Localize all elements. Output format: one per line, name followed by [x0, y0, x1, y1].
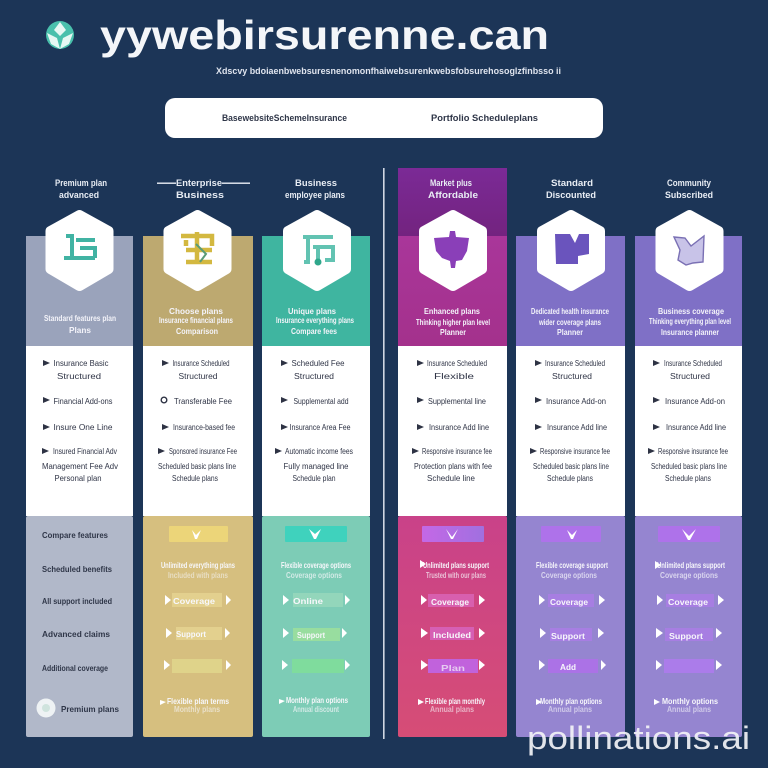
column 2 band text: Choose plans	[169, 306, 223, 316]
column 4 lower rows: Included	[433, 630, 471, 640]
column 2 lower rows: Flexible plan terms	[167, 696, 229, 706]
column 2 lower rows: Unlimited everything plans	[161, 560, 235, 570]
column 5 lower rows: Coverage options	[541, 570, 597, 580]
column 4 lower rows: Unlimited plans support	[423, 560, 489, 570]
column 3 list: Structured	[294, 372, 334, 381]
column 3 list: Automatic income fees	[285, 447, 353, 456]
title: yywebirsurenne.can	[100, 12, 549, 58]
column 6 list: Scheduled basic plans line	[651, 462, 727, 471]
column 5 heading: Discounted	[546, 190, 596, 200]
column 1 hexagon icon	[50, 215, 108, 286]
column 4 list: Responsive insurance fee	[422, 447, 492, 456]
column 2 list	[158, 359, 237, 483]
logo icon	[46, 21, 74, 49]
column 5 list: Structured	[552, 372, 592, 381]
column 6 list: Structured	[670, 372, 710, 381]
column 1 lower rows: Compare features	[42, 530, 108, 540]
column 6 list: Insurance Add line	[666, 423, 726, 432]
column 1 list: Personal plan	[54, 474, 102, 483]
column 5 heading: Standard	[551, 178, 593, 188]
column 2 button	[169, 526, 228, 542]
column 2 heading: Enterprise	[176, 178, 222, 188]
column 6 band text: Business coverage	[658, 306, 724, 316]
column 3 band text	[276, 306, 354, 336]
column 3 list: Schedule plan	[292, 474, 336, 483]
column 4 hexagon icon	[424, 215, 482, 286]
column 6 heading: Community	[667, 178, 711, 188]
column 1: grey	[26, 178, 133, 737]
column 1 heading: advanced	[59, 190, 99, 200]
column 4 lower rows: Trusted with our plans	[426, 570, 486, 580]
column 1 lower rows: Premium plans	[61, 704, 119, 714]
column 2 hexagon icon	[168, 215, 226, 286]
subtitle: Xdscvy bdoiaenbwebsuresnenomonfhaiwebsurenkwebsfobsurehosoglzfinbsso ii	[216, 66, 561, 76]
column 5 list	[530, 359, 610, 483]
column 5 band text: wider coverage plans	[538, 317, 601, 327]
column 3 heading	[285, 178, 345, 200]
column 5 list: Insurance Scheduled	[545, 359, 605, 368]
column 6 lower rows: Unlimited plans support	[657, 560, 725, 570]
column 5 list: Insurance Add-on	[546, 397, 606, 406]
column 6 heading: Subscribed	[665, 190, 713, 200]
column 1 list: Financial Add-ons	[54, 397, 112, 406]
column 6: violet	[635, 178, 742, 737]
column 2 band text: Insurance financial plans	[159, 315, 233, 325]
column 5 lower rows: Support	[551, 631, 585, 641]
column 1 band text: Plans	[69, 325, 91, 335]
column 1 heading: Premium plan	[55, 178, 107, 188]
column 1 lower rows: Advanced claims	[42, 629, 110, 639]
column 1 band text	[44, 313, 116, 335]
column 4 list: Schedule line	[427, 474, 476, 483]
column 3 heading: employee plans	[285, 190, 345, 200]
column 5 lower rows: Monthly plan options	[540, 696, 602, 706]
column 6 list: Schedule plans	[665, 474, 711, 483]
column 4 lower rows: Plan	[441, 663, 465, 673]
column 5 button	[541, 526, 601, 542]
column 1 list: Management Fee Adv	[42, 462, 118, 471]
column 1 lower rows	[42, 530, 119, 714]
column 3 lower rows: Monthly plan options	[286, 695, 348, 705]
column 5 band text: Dedicated health insurance	[531, 306, 609, 316]
column 3 hexagon icon	[288, 215, 346, 286]
column 2: gold	[143, 176, 253, 737]
column 4 list	[412, 359, 492, 483]
column 6 band text: Insurance planner	[661, 327, 720, 337]
column 5 list: Scheduled basic plans line	[533, 462, 609, 471]
column 3 list: Supplemental add	[294, 397, 348, 406]
column 1 badge icon	[36, 698, 56, 718]
column 5 lower rows: Annual plans	[548, 704, 592, 714]
column 1 list: Structured	[57, 372, 101, 381]
column 3 lower rows: Support	[297, 630, 325, 640]
column 4 lower rows	[418, 560, 489, 714]
column 3 list: Scheduled Fee	[292, 359, 345, 368]
column 4 button	[422, 526, 484, 542]
column 5 hexagon icon	[542, 215, 600, 286]
column 6 lower rows: Monthly options	[662, 696, 718, 706]
column 6 list	[648, 359, 728, 483]
column 2 lower rows: Monthly plans	[174, 704, 220, 714]
column 3 lower rows: Flexible coverage options	[281, 560, 351, 570]
column 5 lower rows	[536, 560, 608, 714]
column 1 lower rows: All support included	[42, 596, 112, 606]
column 4 list: Insurance Scheduled	[427, 359, 487, 368]
column 5 lower rows: Add	[560, 662, 576, 672]
header bar: Portfolio Scheduleplans	[431, 113, 538, 124]
column 5 heading	[546, 178, 596, 200]
column 3 band text: Compare fees	[291, 326, 337, 336]
column 4 lower rows: Coverage	[431, 597, 469, 607]
column 6 lower rows: Support	[669, 631, 703, 641]
column 6 band text	[649, 306, 731, 337]
column 3 list	[275, 359, 353, 483]
column 6 lower rows	[654, 560, 725, 714]
column 2 list: Insurance Scheduled	[172, 359, 230, 368]
column 4 list: Flexible	[434, 372, 475, 381]
column 2 band text	[159, 306, 233, 336]
column 3 lower rows: Coverage options	[286, 570, 342, 580]
column 1 band text: Standard features plan	[44, 313, 116, 323]
column 2 heading: Business	[176, 190, 224, 200]
column 2 lower rows: Coverage	[173, 596, 215, 606]
column 6 band text: Thinking everything plan level	[649, 316, 731, 326]
column 2 heading	[157, 176, 250, 200]
column 3 band text: Unique plans	[288, 306, 336, 316]
column 5 lower rows: Coverage	[550, 597, 588, 607]
column 3 heading: Business	[295, 178, 337, 188]
column 3 list: Fully managed line	[284, 462, 349, 471]
column 4 lower rows: Flexible plan monthly	[425, 696, 485, 706]
column 2 list: Sponsored insurance Fee	[169, 447, 237, 456]
column 6 button	[658, 526, 720, 542]
column 4 band text: Enhanced plans	[424, 306, 480, 316]
column 2 list: Schedule plans	[172, 474, 218, 483]
column 2 lower rows: Included with plans	[168, 570, 228, 580]
column 4 list: Insurance Add line	[429, 423, 489, 432]
column 4 heading: Affordable	[428, 190, 478, 200]
column 6 list: Responsive insurance fee	[658, 447, 728, 456]
column 5: violet	[516, 178, 625, 737]
column 5 list: Schedule plans	[547, 474, 593, 483]
column 1 lower rows: Scheduled benefits	[42, 564, 112, 574]
column 1 list: Insured Financial Adv	[53, 447, 117, 456]
column 1 list	[42, 359, 118, 483]
column 4 heading	[428, 178, 478, 200]
column 5 lower rows: Flexible coverage support	[536, 560, 608, 570]
column 4 lower rows: Annual plans	[430, 704, 474, 714]
column 5 list: Responsive insurance fee	[540, 447, 610, 456]
header bar: BasewebsiteSchemeInsurance	[222, 113, 347, 124]
column 1 lower rows: Additional coverage	[42, 663, 108, 673]
column 6 lower rows: Coverage	[668, 597, 708, 607]
column 2 band text: Comparison	[176, 326, 218, 336]
column 6 list: Insurance Add-on	[665, 397, 725, 406]
column 4 list: Protection plans with fee	[414, 462, 492, 471]
column 2 lower rows: Support	[176, 629, 206, 639]
column 3 list: Insurance Area Fee	[290, 423, 351, 432]
column 6 lower rows: Annual plans	[667, 704, 711, 714]
column 6 lower rows: Coverage options	[660, 570, 718, 580]
column 2 list: Insurance-based fee	[173, 423, 235, 432]
column 5 band text	[531, 306, 609, 337]
column 2 lower rows	[160, 560, 235, 714]
column 2 list: Structured	[178, 372, 218, 381]
column 2 list: Transferable Fee	[174, 397, 233, 406]
column 4 list: Supplemental line	[428, 397, 486, 406]
watermark: pollinations.ai	[527, 720, 750, 756]
column 6 heading	[665, 178, 713, 200]
column 3 lower rows: Annual discount	[293, 704, 339, 714]
column 4 band text: Planner	[440, 327, 467, 337]
column 6 list: Insurance Scheduled	[664, 359, 722, 368]
divider	[383, 168, 385, 739]
column 4 top tab	[398, 168, 507, 236]
column 4 band text: Thinking higher plan level	[416, 317, 490, 327]
column 3 lower rows	[279, 560, 351, 714]
column 1 list: Insurance Basic	[54, 359, 108, 368]
column 2 list: Scheduled basic plans line	[158, 462, 236, 471]
column 3 band text: Insurance everything plans	[276, 315, 354, 325]
column 3 lower rows: Online	[293, 596, 323, 606]
column 5 list: Insurance Add line	[547, 423, 607, 432]
column 1 list: Insure One Line	[54, 423, 113, 432]
column 3: teal	[262, 178, 370, 737]
header bar	[165, 98, 603, 138]
column 1 heading	[55, 178, 107, 200]
column 4 heading: Market plus	[430, 178, 472, 188]
column 3 button	[285, 526, 347, 542]
column 6 hexagon icon	[660, 215, 718, 286]
column 5 band text: Planner	[557, 327, 584, 337]
column 4 band text	[416, 306, 490, 337]
column 4: magenta highlighted	[398, 168, 507, 737]
